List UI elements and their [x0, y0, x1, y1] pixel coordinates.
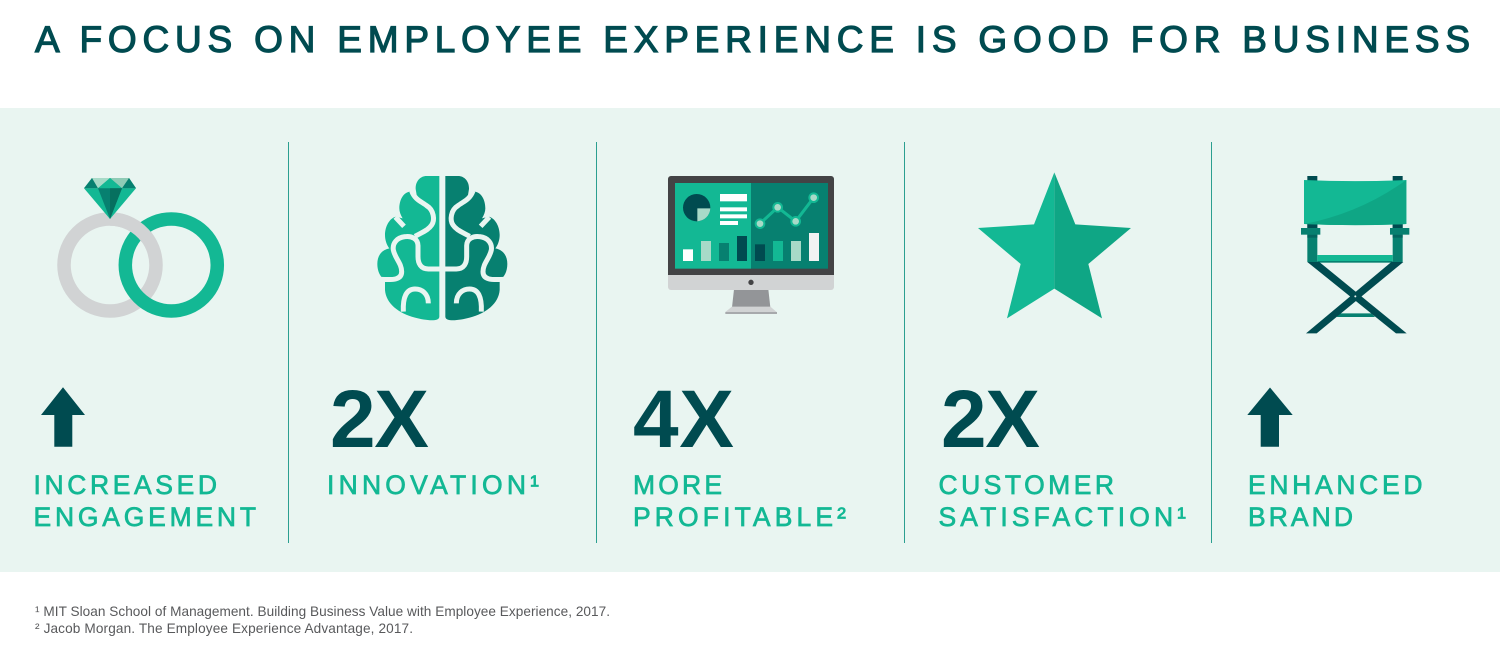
label: more profitable: MORE	[633, 470, 722, 500]
footnotes: ² Jacob Morgan. The Employee Experience Advantage, 2017.	[35, 621, 413, 636]
panel: more profitable	[633, 176, 846, 532]
label: customer satisfaction: CUSTOMER	[938, 470, 1114, 500]
icon: up arrow	[1247, 388, 1293, 447]
label: more profitable	[633, 470, 846, 532]
big number: 2X: 2X	[941, 374, 1040, 465]
label: innovation: INNOVATION¹	[327, 470, 539, 500]
panel: enhanced brand	[1247, 176, 1422, 532]
icon: desktop monitor with dashboard	[668, 176, 834, 314]
background band	[0, 108, 1500, 572]
label: increased engagement	[34, 470, 256, 532]
footnotes: ¹ MIT Sloan School of Management. Building Business Value with Employee Experience, 2017.	[35, 604, 610, 619]
label: more profitable: PROFITABLE²	[633, 502, 846, 532]
label: customer satisfaction: SATISFACTION¹	[938, 502, 1186, 532]
label: increased engagement: INCREASED	[34, 470, 217, 500]
panel: increased engagement	[34, 178, 256, 532]
big number: 4X: 4X	[633, 374, 734, 465]
panel: customer satisfaction	[938, 172, 1186, 532]
title: A FOCUS ON EMPLOYEE EXPERIENCE IS GOOD FOR BUSINESS	[35, 19, 1470, 60]
label: increased engagement: ENGAGEMENT	[34, 502, 256, 532]
label: enhanced brand: ENHANCED	[1248, 470, 1422, 500]
big number: 2X: 2X	[330, 374, 429, 465]
label: enhanced brand	[1248, 470, 1422, 532]
footnotes	[35, 604, 610, 636]
icon: up arrow	[41, 387, 85, 447]
label: customer satisfaction	[938, 470, 1186, 532]
icon: interlocked rings with diamond	[64, 178, 217, 311]
icon: brain	[377, 176, 507, 320]
panel: innovation	[327, 176, 539, 500]
icon: star	[978, 172, 1131, 318]
icon: director's chair	[1301, 176, 1409, 333]
label: enhanced brand: BRAND	[1248, 502, 1353, 532]
